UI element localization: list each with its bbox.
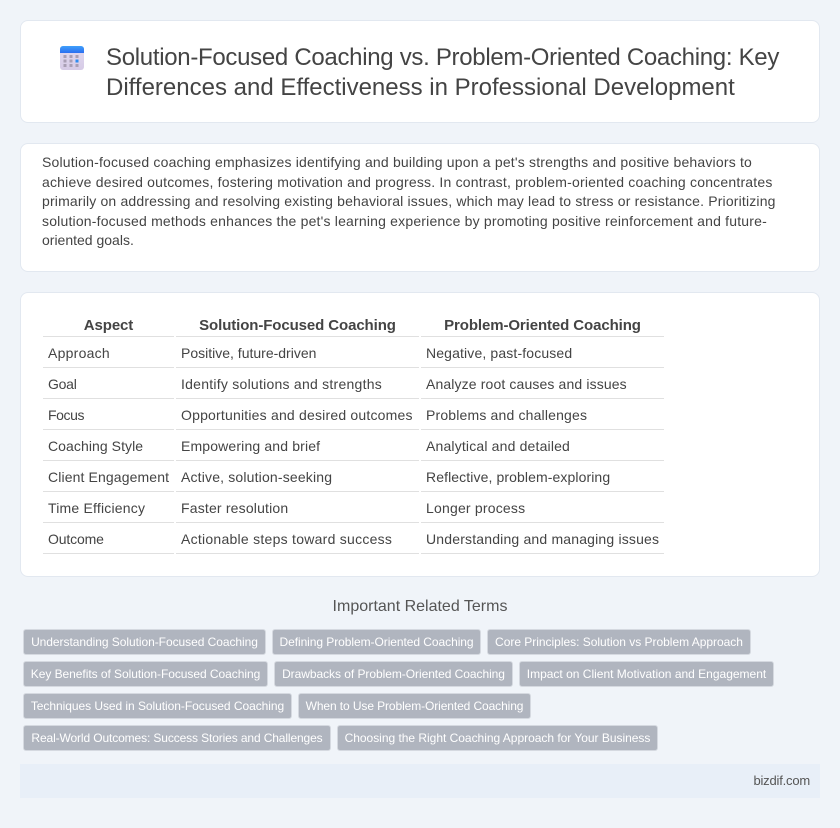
tag: When to Use Problem-Oriented Coaching <box>306 699 523 713</box>
tag: Understanding Solution-Focused Coaching <box>31 635 258 649</box>
tag: Impact on Client Motivation and Engagement <box>527 667 766 681</box>
table header <box>84 317 641 334</box>
row: approach: Approach <box>48 345 110 361</box>
description text: Solution-focused coaching emphasizes identifying and building upon a pet's strengths and positive behaviors to <box>42 154 752 170</box>
description card <box>20 143 820 272</box>
row: outcome: Understanding and managing issues <box>426 531 659 547</box>
header card <box>20 20 820 123</box>
tag: Key Benefits of Solution-Focused Coaching <box>31 667 260 681</box>
tag: Techniques Used in Solution-Focused Coaching <box>31 699 284 713</box>
row: approach: Positive, future-driven <box>181 345 316 361</box>
title: Solution-Focused Coaching vs. Problem-Oriented Coaching: Key <box>106 44 779 71</box>
description text <box>42 154 776 248</box>
row: client engagement <box>48 469 610 485</box>
title <box>106 44 780 101</box>
tag <box>23 661 268 687</box>
tag: Drawbacks of Problem-Oriented Coaching <box>282 667 505 681</box>
row: outcome: Actionable steps toward success <box>181 531 392 547</box>
description text: solution-focused methods enhances the pet's learning experience by promoting positive reinforcement and future- <box>42 212 767 228</box>
row: approach <box>48 345 572 361</box>
footer source: bizdif.com <box>753 773 810 788</box>
tag: Real-World Outcomes: Success Stories and Challenges <box>31 731 323 745</box>
row: time efficiency <box>48 500 525 516</box>
description text: oriented goals. <box>42 232 134 248</box>
tag <box>298 693 531 719</box>
tag <box>487 629 751 655</box>
tag: Defining Problem-Oriented Coaching <box>279 635 474 649</box>
tag <box>519 661 774 687</box>
tag <box>23 725 331 751</box>
related terms tags <box>23 629 774 751</box>
description text: achieve desired outcomes, fostering motivation and progress. In contrast, problem-oriented coaching concentrates <box>42 174 773 190</box>
table header: Solution-Focused Coaching <box>199 317 396 334</box>
related terms heading: Important Related Terms <box>333 598 507 615</box>
tag <box>337 725 658 751</box>
row: client engagement: Client Engagement <box>48 469 169 485</box>
tag: Core Principles: Solution vs Problem Approach <box>495 635 743 649</box>
description text: primarily on addressing and resolving existing behavioral issues, which may lead to stress or resistance. Prioritizing <box>42 193 776 209</box>
row: focus: Opportunities and desired outcomes <box>181 407 413 423</box>
row: outcome <box>48 531 659 547</box>
table header: Problem-Oriented Coaching <box>444 317 641 334</box>
row: time efficiency: Faster resolution <box>181 500 288 516</box>
row: time efficiency: Longer process <box>426 500 525 516</box>
title: Differences and Effectiveness in Professional Development <box>106 74 735 101</box>
row: client engagement: Reflective, problem-exploring <box>426 469 610 485</box>
row: focus: Focus <box>48 407 84 423</box>
row: coaching style: Empowering and brief <box>181 438 320 454</box>
row: coaching style <box>48 438 570 454</box>
row: coaching style: Coaching Style <box>48 438 143 454</box>
table card <box>20 292 820 577</box>
footer bar <box>20 764 820 798</box>
tag <box>272 629 481 655</box>
row: goal <box>48 376 627 392</box>
tag: Choosing the Right Coaching Approach for Your Business <box>345 731 650 745</box>
row: time efficiency: Time Efficiency <box>48 500 145 516</box>
icon: calendar <box>60 46 84 70</box>
row: focus <box>48 407 587 423</box>
row: goal: Goal <box>48 376 77 392</box>
comparison table <box>43 317 664 554</box>
tag <box>23 629 266 655</box>
tag <box>274 661 513 687</box>
row: focus: Problems and challenges <box>426 407 587 423</box>
row: coaching style: Analytical and detailed <box>426 438 570 454</box>
row: goal: Analyze root causes and issues <box>426 376 627 392</box>
row: approach: Negative, past-focused <box>426 345 572 361</box>
tag <box>23 693 292 719</box>
row: outcome: Outcome <box>48 531 104 547</box>
row: goal: Identify solutions and strengths <box>181 376 382 392</box>
table header: Aspect <box>84 317 133 334</box>
row: client engagement: Active, solution-seeking <box>181 469 332 485</box>
